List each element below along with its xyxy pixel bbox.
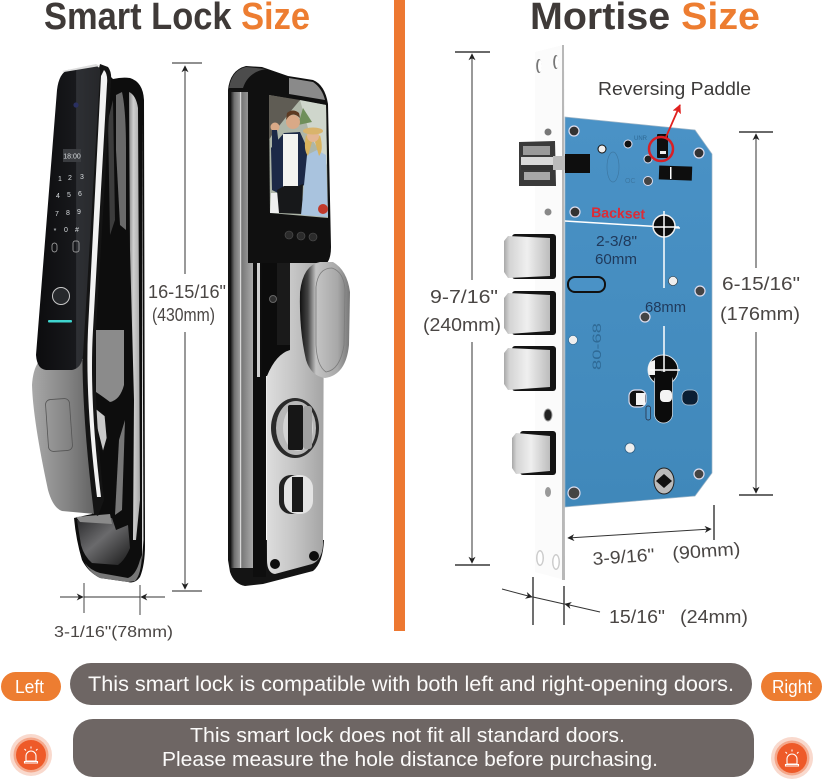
keypad and display xyxy=(52,149,84,252)
fingerprint sensor xyxy=(52,288,70,304)
silver edge strip xyxy=(82,64,111,516)
backset value: 60mm xyxy=(595,251,637,268)
case slots and screws: OC xyxy=(625,178,636,185)
warning icon right xyxy=(771,737,813,779)
keypad and display: 7 xyxy=(55,211,59,218)
dimension: faceplate width: (24mm) xyxy=(680,607,748,627)
thumb turn xyxy=(271,398,319,458)
dimension: faceplate width: 15/16" xyxy=(609,607,665,627)
woman xyxy=(301,150,328,217)
compatibility banner xyxy=(70,663,752,705)
three buttons xyxy=(285,231,317,241)
screws xyxy=(270,559,280,569)
dimension: mortise screw spacing xyxy=(720,132,800,495)
warning banner: Please measure the hole distance before purchasing. xyxy=(162,748,658,771)
handle knob xyxy=(300,262,350,378)
small neck screw xyxy=(270,296,276,302)
compatibility banner: This smart lock is compatible with both left and right-opening doors. xyxy=(88,673,734,696)
mortise lock xyxy=(504,45,712,580)
80-68 label: 80-68 xyxy=(590,323,604,370)
case slots and screws: UNR xyxy=(634,136,648,142)
dimension: case depth: (90mm) xyxy=(672,539,741,563)
keypad and display: 3 xyxy=(80,174,84,181)
right badge: Right xyxy=(772,677,812,697)
four bolts xyxy=(504,234,556,475)
backset guide lines xyxy=(565,211,680,372)
dimension: lock height xyxy=(148,63,226,591)
black neck xyxy=(262,263,290,376)
keypad and display: * xyxy=(54,228,57,235)
dimension: faceplate width xyxy=(502,577,748,627)
camera lens xyxy=(73,102,79,108)
glossy head band xyxy=(289,78,325,100)
warning banner xyxy=(73,719,754,777)
latch xyxy=(519,141,565,186)
keypad and display: 0 xyxy=(64,227,68,234)
keypad and display: 6 xyxy=(78,191,82,198)
warning icon left xyxy=(10,734,52,776)
upper handle streaks xyxy=(116,92,126,230)
keypad and display: 9 xyxy=(77,209,81,216)
outer dark silhouette xyxy=(228,90,324,586)
key cover xyxy=(279,475,313,514)
silver back rail xyxy=(129,92,140,540)
warning banner: This smart lock does not fit all standard doors. xyxy=(190,724,625,747)
dimension: lock height: 16-15/16" xyxy=(148,282,226,302)
dimension: case depth xyxy=(568,505,741,569)
dimension: mortise faceplate height xyxy=(423,52,501,565)
backset value xyxy=(595,233,637,268)
lower base xyxy=(77,518,130,565)
68mm label: 68mm xyxy=(645,299,686,316)
dimension: case depth: 3-9/16" xyxy=(592,545,655,569)
smart lock rear view xyxy=(228,66,350,586)
dimension: mortise screw spacing: 6-15/16" xyxy=(722,274,800,294)
left metal strips xyxy=(231,92,253,568)
silver plate xyxy=(266,263,324,574)
mid handle grey xyxy=(96,330,124,402)
dimension: lock width: 3-1/16"(78mm) xyxy=(54,624,173,641)
smart lock front view xyxy=(32,64,145,582)
dimension: lock width xyxy=(54,583,173,641)
man xyxy=(271,132,308,193)
keypad and display: 1 xyxy=(58,176,62,183)
reversing paddle label: Reversing Paddle xyxy=(598,79,751,99)
backset value: 2-3/8" xyxy=(596,233,637,250)
keypad and display: 2 xyxy=(68,175,72,182)
left badge xyxy=(1,672,61,701)
blue case plate xyxy=(565,117,712,507)
teal status light xyxy=(48,320,72,322)
keypad and display: 18:00 xyxy=(63,154,81,160)
orange vertical divider xyxy=(394,0,405,631)
dimension: lock height: (430mm) xyxy=(152,305,215,325)
black display head xyxy=(228,66,331,263)
case slots and screws xyxy=(565,126,705,499)
black front panel xyxy=(36,66,100,370)
dimension: mortise screw spacing: (176mm) xyxy=(720,304,800,324)
gray lower body xyxy=(32,360,95,514)
cylinder cutout xyxy=(629,355,698,423)
keypad and display: 5 xyxy=(67,192,71,199)
dimension: mortise faceplate height: (240mm) xyxy=(423,315,501,335)
sensor outline xyxy=(45,398,73,452)
keypad and display: # xyxy=(75,227,79,234)
right badge xyxy=(761,672,822,701)
keypad and display: 8 xyxy=(66,210,70,217)
left badge: Left xyxy=(15,677,44,697)
keypad and display: 4 xyxy=(56,193,60,200)
video screen with visitors xyxy=(269,95,328,218)
dimension: mortise faceplate height: 9-7/16" xyxy=(430,287,498,307)
spindle hole xyxy=(654,468,674,494)
rear handle silhouette xyxy=(74,66,145,582)
red circled reversing paddle xyxy=(649,105,680,161)
backset label: Backset xyxy=(591,204,646,222)
faceplate xyxy=(535,45,565,580)
